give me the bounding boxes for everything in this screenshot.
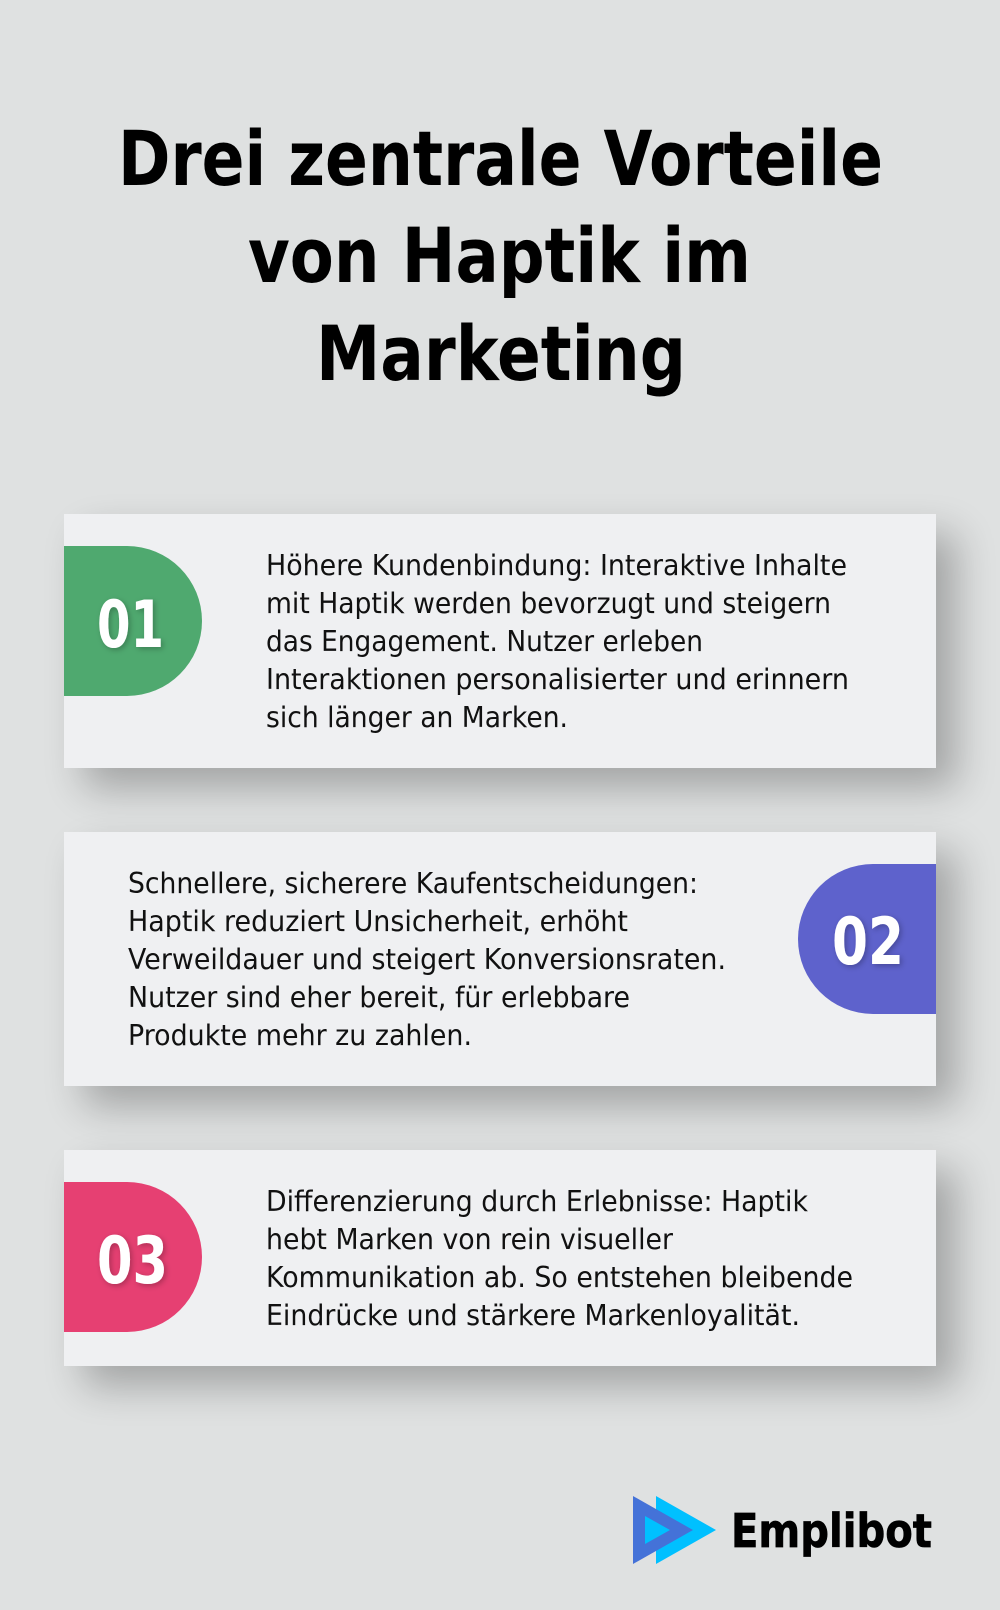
title xyxy=(118,114,883,398)
text: benefit 03: hebt Marken von rein visueller xyxy=(266,1223,673,1256)
text: benefit 01: sich länger an Marken. xyxy=(266,701,568,734)
text: benefit 01: Interaktionen personalisierter und erinnern xyxy=(266,663,849,696)
panel: benefit 03 xyxy=(64,1150,956,1386)
number badge 01 xyxy=(64,546,202,696)
number badge 01: 01 xyxy=(97,588,164,663)
number badge 03: 03 xyxy=(97,1224,168,1299)
text: benefit 01: Höhere Kundenbindung: Interaktive Inhalte xyxy=(266,549,847,582)
number badge 02: 02 xyxy=(832,905,904,980)
text: benefit 03: Kommunikation ab. So entstehen bleibende xyxy=(266,1261,853,1294)
panel: benefit 01 xyxy=(64,514,956,788)
number badge 03 xyxy=(64,1182,202,1332)
text: benefit 03: Eindrücke und stärkere Markenloyalität. xyxy=(266,1299,800,1332)
icon: play triangles xyxy=(633,1496,716,1564)
text: benefit 01 xyxy=(266,549,849,734)
title: Marketing xyxy=(316,309,686,398)
text: benefit 03: Differenzierung durch Erlebnisse: Haptik xyxy=(266,1185,808,1218)
text: benefit 02: Produkte mehr zu zahlen. xyxy=(128,1019,472,1052)
panel: benefit 02 xyxy=(64,832,956,1106)
text: benefit 03 xyxy=(266,1185,853,1332)
text: benefit 02 xyxy=(128,867,726,1052)
title: von Haptik im xyxy=(248,211,751,300)
text: benefit 01: mit Haptik werden bevorzugt und steigern xyxy=(266,587,831,620)
text: benefit 02: Schnellere, sicherere Kaufentscheidungen: xyxy=(128,867,698,900)
logo: Emplibot xyxy=(633,1496,932,1564)
text: benefit 02: Haptik reduziert Unsicherheit, erhöht xyxy=(128,905,628,938)
logo wordmark: Emplibot xyxy=(731,1504,932,1558)
text: benefit 02: Verweildauer und steigert Konversionsraten. xyxy=(128,943,726,976)
text: benefit 01: das Engagement. Nutzer erleben xyxy=(266,625,703,658)
number badge 02 xyxy=(798,864,936,1014)
text: benefit 02: Nutzer sind eher bereit, für erlebbare xyxy=(128,981,630,1014)
